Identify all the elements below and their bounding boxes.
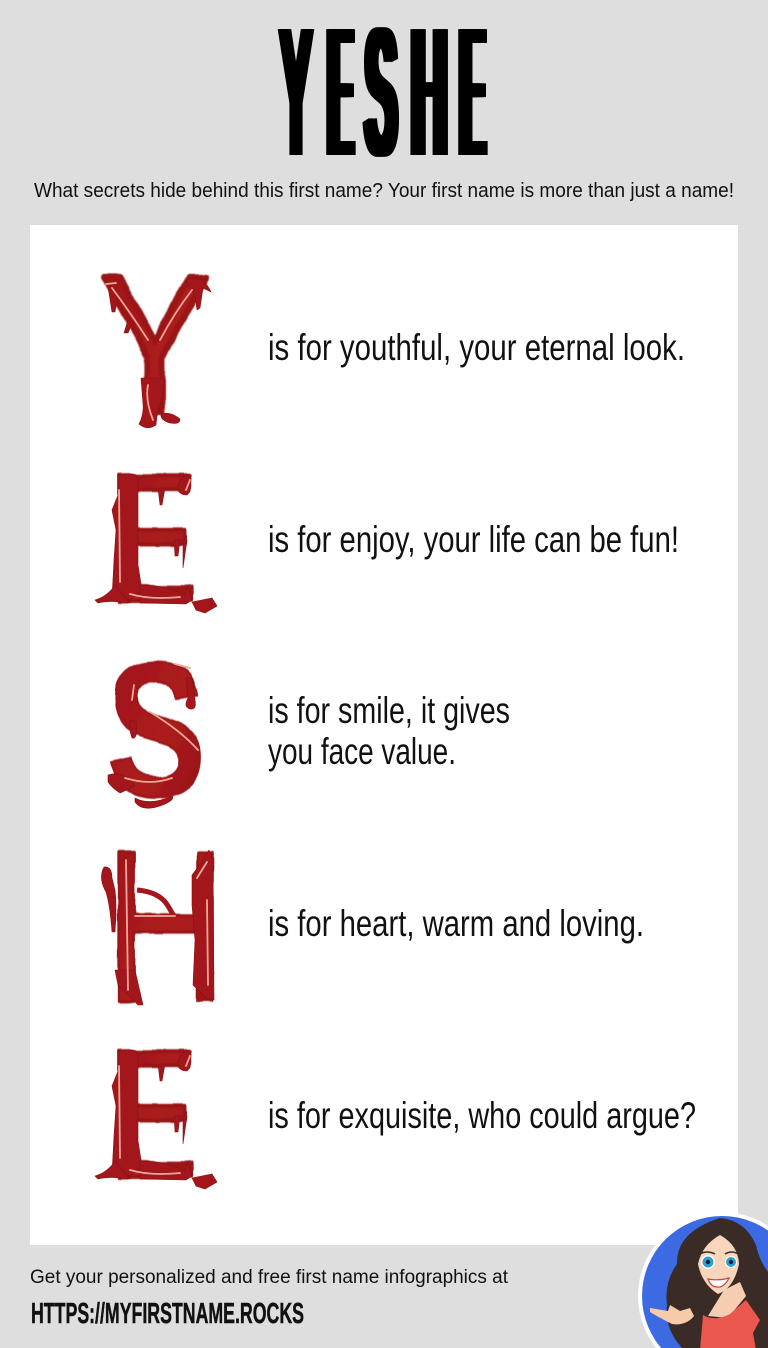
text: S lines [268,690,510,772]
footer url: HTTPS://MYFIRSTNAME.ROCKS [31,1298,304,1330]
text: S lines: you face value. [268,731,456,772]
row: letter H [101,807,644,1048]
illustration: blood letter Y: Y [100,237,210,454]
illustration: blood letter E: E [108,436,198,640]
illustration: blood letter S: S [106,623,206,837]
title [278,0,488,194]
text: H line: is for heart, warm and loving. [268,903,644,944]
row: letter E second [95,1012,696,1216]
illustration: blood letter E second: E [108,1012,198,1216]
row: letter E [95,436,679,640]
row: letter Y [100,237,685,454]
illustration: blood letter H: H [105,807,226,1048]
subtitle: What secrets hide behind this first name? Your first name is more than just a name! [34,180,734,202]
text: S lines: is for smile, it gives [268,690,510,731]
row: letter S [106,623,510,837]
icon: avatar [638,1212,768,1348]
footer text: Get your personalized and free first name infographics at [30,1267,509,1288]
panel: name letters [30,225,738,1245]
